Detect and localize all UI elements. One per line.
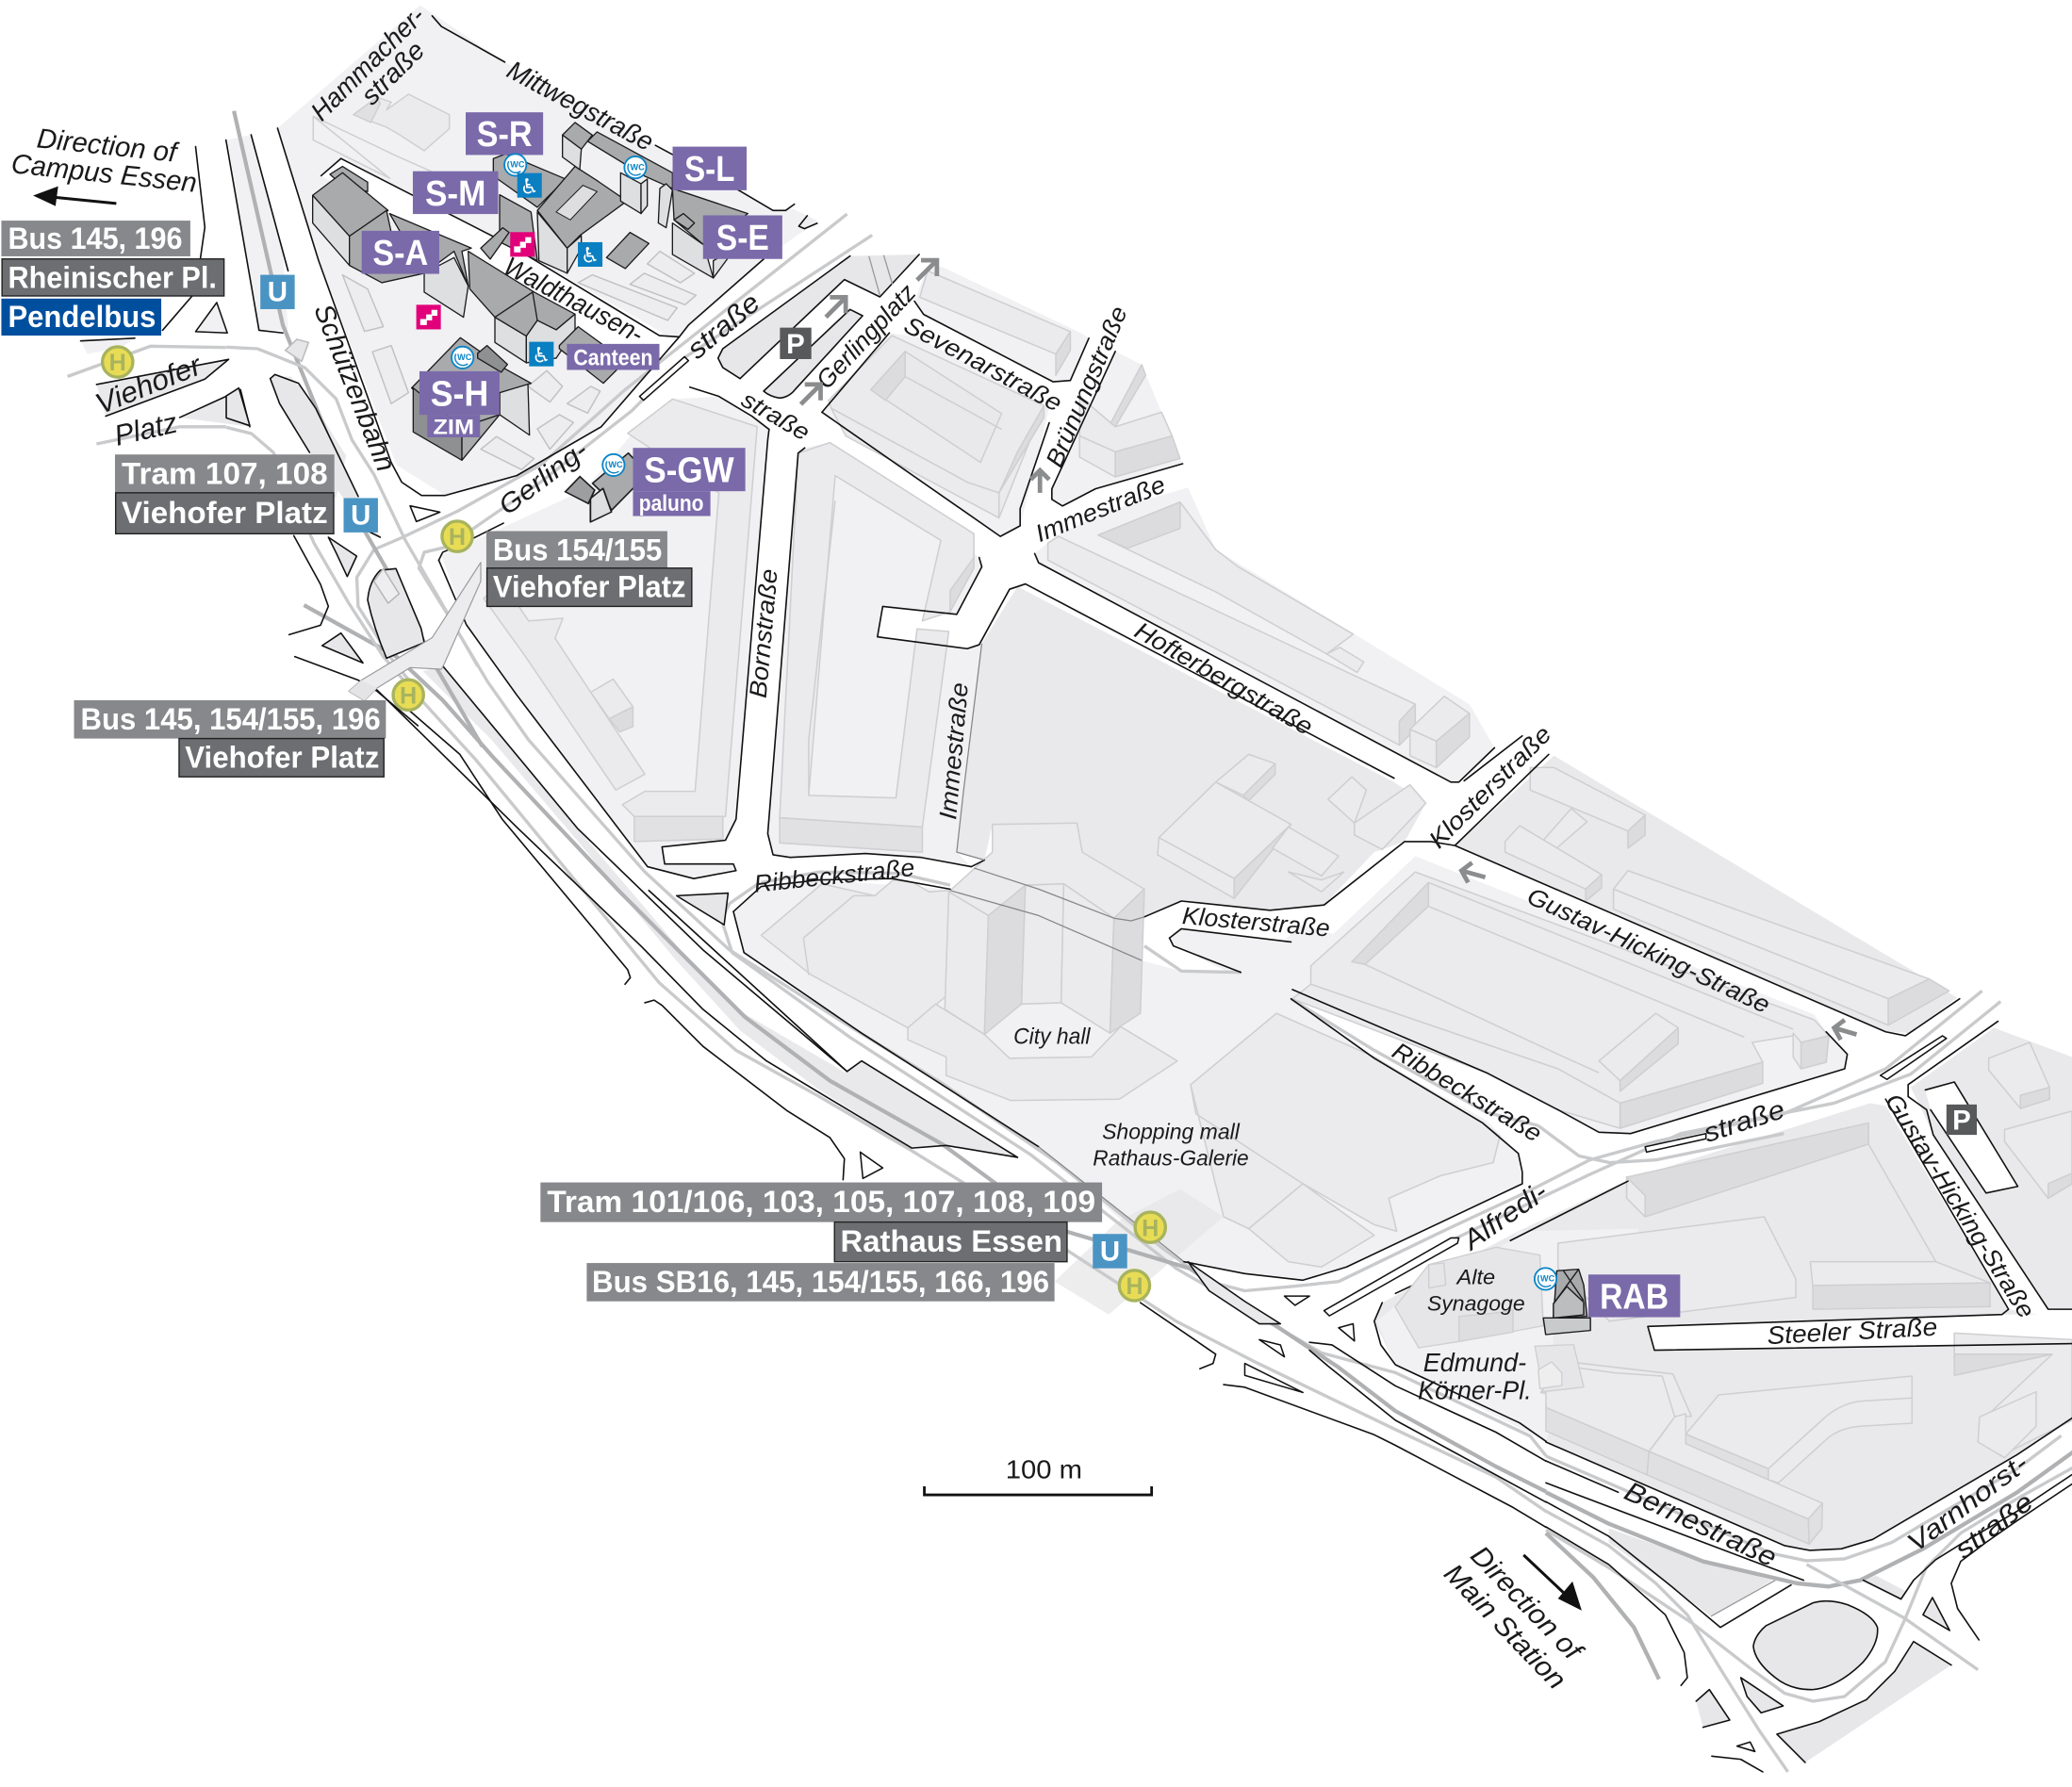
building: S-L wing — [563, 123, 672, 228]
text: street names: Ribbeckstraße — [753, 855, 916, 898]
text: street names: Ribbeckstraße — [1388, 1038, 1546, 1148]
road grey centre lines — [68, 214, 2000, 1512]
icon: stop H Rheinischer Platz — [103, 347, 133, 377]
tram tracks — [234, 111, 483, 746]
icon: stop H Rathaus north: H — [1142, 1215, 1159, 1241]
icon: WC S-L: WC — [630, 162, 645, 172]
campus parking outlines and dark buildings — [313, 94, 748, 469]
icon: wheelchair Canteen: ♿ — [532, 343, 551, 368]
icon: U-Bahn Rheinischer Platz: U — [268, 277, 288, 308]
text: street names: Hofterbergstraße — [1130, 617, 1317, 741]
icon: stop H Viehofer north: H — [449, 524, 466, 550]
label: S-R: S-R — [477, 115, 533, 155]
icon: stop H Viehofer north — [442, 521, 472, 551]
text: street names: Alfredi- — [1455, 1176, 1554, 1257]
transit stop labels: Tram Viehofer Platz: Tram 107, 108 — [122, 457, 328, 491]
transit stop labels: Rheinischer Platz: Rheinischer Pl. — [8, 261, 217, 295]
label: S-H with ZIM — [419, 371, 500, 438]
text: street names: Gustav-Hicking-Straße — [1880, 1090, 2039, 1323]
direction note: Campus Essen: Direction of — [36, 123, 181, 169]
icon: U-Bahn Rathaus Essen: U — [1100, 1236, 1120, 1267]
icon: parking Gerlingplatz: P — [786, 329, 805, 360]
text: street names: Sevenarstraße — [899, 312, 1066, 418]
icon: stop H Viehofer south — [393, 680, 423, 710]
text: street names: City hall — [1013, 1024, 1091, 1049]
direction note: Main Station: Direction of — [1464, 1540, 1589, 1668]
icon: WC RAB: WC — [1540, 1274, 1555, 1284]
label: S-GW with paluno — [633, 448, 746, 516]
building: RAB — [1543, 1270, 1590, 1335]
transit stop labels: Rathaus Essen: Rathaus Essen — [841, 1224, 1062, 1258]
label: S-H with ZIM: S-H — [431, 374, 488, 414]
text: street names: Immestraße — [1032, 471, 1169, 548]
main tram line from Viehofer Platz to Bernestraße — [304, 605, 1546, 1492]
icon: stairs S-M — [510, 232, 534, 256]
icon: WC S-R — [504, 154, 526, 176]
text: street names: Bernestraße — [1620, 1476, 1782, 1573]
building: S-M wing — [481, 154, 627, 273]
text: street names: Hammacher- — [305, 1, 430, 126]
text: street names: Viehofer — [90, 348, 207, 420]
building labels — [362, 112, 1680, 1318]
label: S-M: S-M — [425, 174, 485, 214]
buildings south of Steeler Straße along Bernestraße — [1546, 1364, 2036, 1544]
building: S-GW paluno — [566, 453, 634, 522]
text: street names: Gerling- — [493, 435, 593, 520]
transit stop labels: Bus 154/155 Viehofer Platz: Bus 154/155 — [493, 533, 662, 566]
text: street names: Körner-Pl. — [1418, 1375, 1532, 1404]
text: street names: Bornstraße — [746, 567, 783, 699]
icon: parking Gerlingplatz — [780, 328, 812, 360]
text: street names: Schützenbahn — [307, 300, 402, 476]
transit stop labels: Bus 145, 154/155, 196 Viehofer Platz — [74, 700, 386, 777]
text: street names: Alte — [1455, 1265, 1495, 1288]
direction note: Campus Essen — [9, 123, 198, 206]
text: street names: Platz — [111, 406, 180, 452]
label: S-E — [703, 215, 782, 259]
transit stop labels: Tram Viehofer Platz: Viehofer Platz — [122, 496, 328, 530]
label: RAB: RAB — [1600, 1277, 1669, 1317]
text: street names: Rathaus-Galerie — [1093, 1145, 1249, 1170]
label: S-GW with paluno: S-GW — [644, 451, 734, 491]
icon: wheelchair S-M: ♿ — [581, 244, 600, 269]
text: street names: Klosterstraße — [1181, 903, 1331, 943]
text: street names: Steeler Straße — [1767, 1313, 1938, 1350]
scale bar — [925, 1455, 1152, 1495]
building: S-E wing — [606, 189, 748, 278]
icon: WC S-GW — [602, 454, 624, 476]
transit stop labels: Rathaus Essen: Bus SB16, 145, 154/155, 166, 196 — [592, 1265, 1049, 1299]
bottom-right road interchange — [1546, 1417, 2072, 1772]
icon: stop H Rathaus south — [1119, 1271, 1150, 1301]
building: S-H tower — [412, 337, 531, 460]
icon: WC S-H: WC — [457, 352, 472, 362]
label: S-L: S-L — [684, 150, 734, 189]
icon: U-Bahn Rathaus Essen — [1093, 1234, 1127, 1269]
building: S-A wing — [313, 167, 625, 384]
label: Canteen: Canteen — [573, 346, 652, 371]
building cluster: Alte Synagoge — [1395, 1247, 1584, 1392]
text: street names: Waldthausen- — [500, 251, 649, 349]
direction note: Campus Essen: Campus Essen — [9, 148, 198, 199]
text: street names: Mittwegstraße — [502, 55, 658, 156]
text: street names: straße — [355, 36, 430, 110]
icon: stop H Rathaus north — [1135, 1212, 1165, 1242]
text: street names: Varnhorst- — [1901, 1449, 2033, 1558]
icon: WC S-R: WC — [510, 160, 525, 170]
transit stop labels: Bus 154/155 Viehofer Platz — [486, 532, 692, 606]
icon: WC S-GW: WC — [608, 460, 623, 469]
label: S-H with ZIM: ZIM — [434, 415, 474, 438]
transit stop labels: Bus 145, 154/155, 196 Viehofer Platz: Bus 145, 154/155, 196 — [81, 702, 381, 736]
transit stop labels: Rathaus Essen — [540, 1183, 1102, 1302]
icon: stairs S-A — [417, 304, 441, 329]
label: S-E: S-E — [716, 219, 769, 258]
translucent pedestrian band at Rathaus — [1055, 1189, 1224, 1315]
icon: stop H Rathaus south: H — [1126, 1273, 1143, 1300]
transit stop labels: Rheinischer Platz — [1, 221, 224, 336]
icon: WC RAB — [1535, 1268, 1556, 1290]
icon: U-Bahn Viehofer Platz — [343, 498, 378, 533]
text: street names: Gerlingplatz — [811, 278, 921, 394]
icon: stop H Viehofer south: H — [400, 682, 417, 709]
text: street names: straße — [682, 287, 766, 365]
white streets cut through the blocks — [321, 158, 2072, 1351]
text: street names: Edmund- — [1423, 1348, 1526, 1377]
icon: U-Bahn Rheinischer Platz — [260, 275, 295, 309]
Gerlingplatz parking strips — [718, 190, 919, 398]
transit stop labels: Rheinischer Platz: Pendelbus — [8, 300, 156, 334]
Viehofer Platz junction — [226, 339, 481, 726]
icon: U-Bahn Viehofer Platz: U — [351, 500, 370, 531]
transit stop labels: Tram Viehofer Platz — [115, 454, 335, 533]
text: street names: straße — [737, 386, 814, 446]
buildings: light grey blocks — [313, 116, 2072, 1456]
icon: stop H Rheinischer Platz: H — [109, 350, 126, 376]
transit stop labels: Bus 154/155 Viehofer Platz: Viehofer Platz — [493, 570, 686, 604]
city hall: ghosted road lines over towers — [950, 868, 1144, 960]
direction note: Main Station: Main Station — [1438, 1558, 1572, 1696]
icon: WC S-L — [624, 156, 647, 178]
label: S-A: S-A — [372, 234, 428, 273]
one-way arrows — [800, 260, 1856, 1040]
transit stop labels: Bus 145, 154/155, 196 Viehofer Platz: Viehofer Platz — [185, 740, 379, 774]
scale bar: 100 m — [1006, 1455, 1082, 1484]
text: street names: Synagoge — [1427, 1292, 1525, 1316]
label: S-GW with paluno: paluno — [639, 491, 703, 516]
text: street names: Gustav-Hicking-Straße — [1523, 883, 1774, 1019]
text: street names: Shopping mall — [1102, 1119, 1241, 1143]
icon: WC S-H — [452, 347, 473, 369]
text: street names: Immestraße — [935, 681, 974, 821]
icon: wheelchair S-R: ♿ — [520, 174, 539, 199]
transit stop labels: Rheinischer Platz: Bus 145, 196 — [8, 221, 182, 255]
text: street names: Brünungstraße — [1042, 303, 1133, 471]
text: street names: straße — [1700, 1094, 1788, 1148]
icon: parking Gustav-Hicking-Straße: P — [1952, 1105, 1971, 1136]
icon: parking Gustav-Hicking-Straße — [1947, 1105, 1977, 1136]
text: street names: Klosterstraße — [1424, 721, 1557, 854]
text: street names: straße — [1949, 1486, 2039, 1564]
transit stop labels: Rathaus Essen: Tram 101/106, 103, 105, 107, 108, 109 — [547, 1185, 1095, 1219]
